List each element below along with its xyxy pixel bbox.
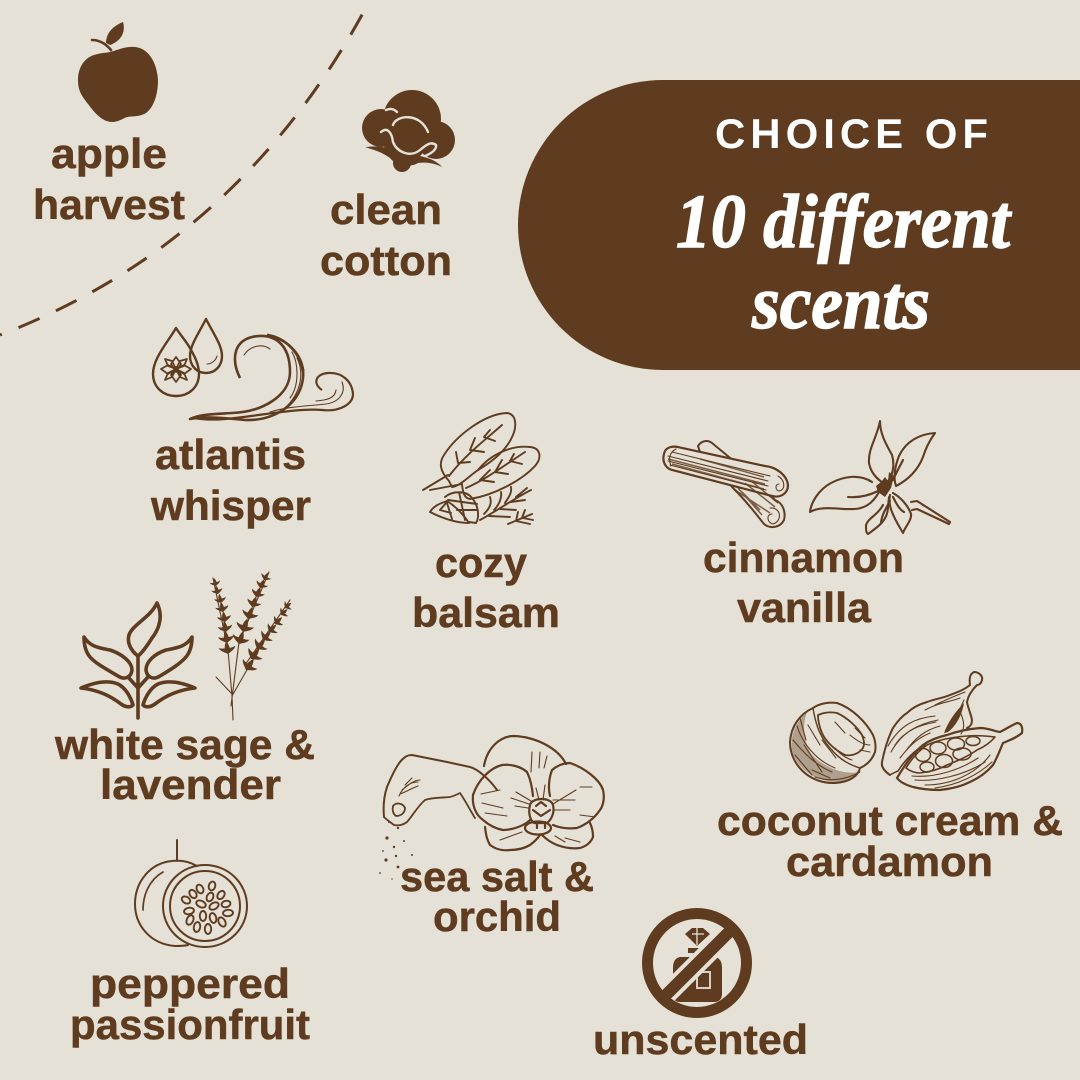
icon: apple bbox=[78, 22, 158, 122]
icon: vanilla flower bbox=[810, 421, 950, 534]
label: peppered passionfruit: peppered bbox=[90, 960, 290, 1007]
icon: lavender bbox=[209, 570, 295, 720]
label: clean cotton: cotton bbox=[320, 237, 452, 284]
icon: coconut half bbox=[790, 703, 876, 783]
heading: 10 different: 10 different bbox=[676, 180, 1013, 264]
scent: apple harvest bbox=[33, 22, 185, 228]
label: peppered passionfruit: passionfruit bbox=[70, 1001, 310, 1048]
scent: unscented bbox=[593, 914, 808, 1063]
header panel bbox=[518, 80, 1080, 370]
icon: no perfume sign bbox=[648, 914, 746, 1012]
scent: sea salt and orchid bbox=[379, 736, 604, 940]
scent: clean cotton bbox=[320, 90, 455, 284]
icon: hand with salt bbox=[379, 755, 497, 880]
icon: cinnamon sticks bbox=[663, 441, 788, 527]
icon: drops and wave bbox=[153, 319, 353, 420]
dashed curved arc bbox=[0, 0, 370, 335]
scent: atlantis whisper bbox=[150, 319, 353, 529]
heading: scents: scents bbox=[751, 261, 930, 345]
icon: orchid bbox=[473, 736, 604, 850]
label: clean cotton: clean bbox=[330, 186, 442, 233]
label: cinnamon vanilla: cinnamon bbox=[703, 534, 904, 581]
label: unscented: unscented bbox=[593, 1016, 808, 1063]
label: apple harvest: harvest bbox=[33, 181, 185, 228]
scent: coconut cream and cardamon bbox=[717, 672, 1063, 885]
icon: passionfruit bbox=[135, 840, 247, 947]
icon: cardamom pods bbox=[882, 672, 1022, 790]
label: white sage and lavender: lavender bbox=[100, 761, 281, 808]
label: sea salt and orchid: orchid bbox=[433, 893, 561, 940]
label: coconut cream and cardamon: coconut cream & bbox=[717, 797, 1063, 844]
icon: cotton boll bbox=[362, 90, 455, 172]
label: coconut cream and cardamon: cardamon bbox=[786, 838, 993, 885]
scent: white sage and lavender bbox=[54, 570, 315, 808]
icon: balsam leaves and citrus bbox=[423, 413, 539, 524]
scent: cinnamon vanilla bbox=[663, 421, 950, 631]
label: cozy balsam: cozy bbox=[435, 539, 528, 586]
label: atlantis whisper: whisper bbox=[150, 482, 311, 529]
scent: cozy balsam bbox=[412, 413, 560, 636]
label: apple harvest: apple bbox=[51, 130, 167, 177]
label: atlantis whisper: atlantis bbox=[155, 431, 306, 478]
label: white sage and lavender: white sage & bbox=[54, 721, 315, 768]
label: cozy balsam: balsam bbox=[412, 589, 560, 636]
label: cinnamon vanilla: vanilla bbox=[737, 584, 872, 631]
icon: white sage bbox=[81, 603, 195, 718]
heading: choice of: CHOICE OF bbox=[715, 110, 988, 157]
label: sea salt and orchid: sea salt & bbox=[400, 853, 594, 900]
scent: peppered passionfruit bbox=[70, 840, 310, 1048]
